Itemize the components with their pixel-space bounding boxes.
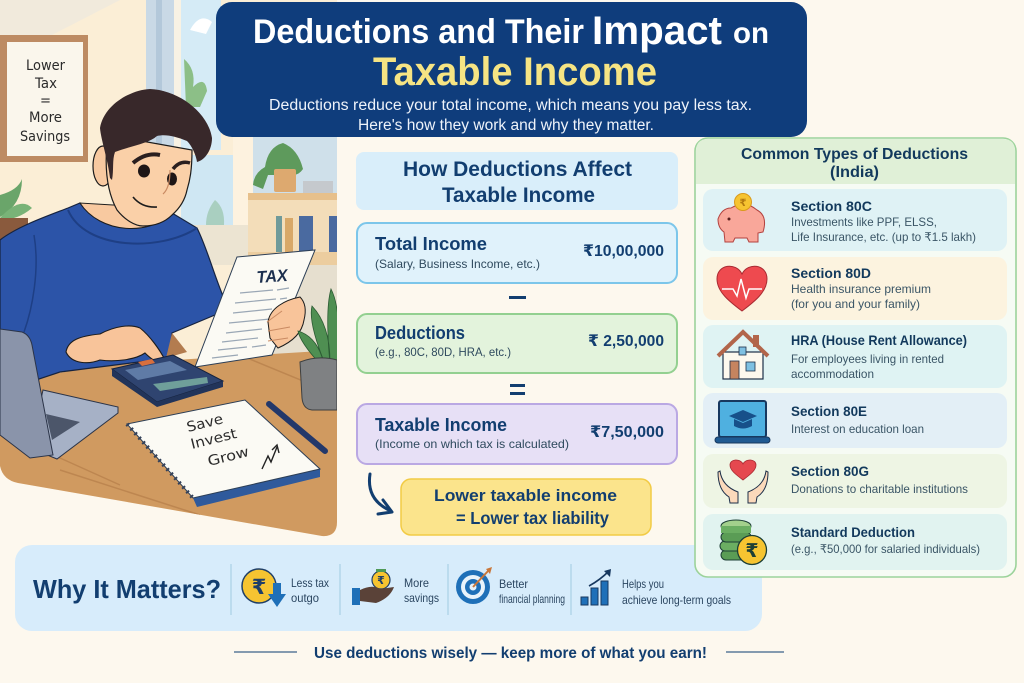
row: section 80C bbox=[703, 189, 1007, 251]
wall frame: = bbox=[40, 93, 51, 109]
row: section 80G: Section 80G bbox=[791, 463, 869, 479]
desk bbox=[0, 350, 337, 540]
item: more savings: ₹ bbox=[377, 575, 385, 587]
item: long-term goals bbox=[581, 569, 731, 607]
row: section 80G: Donations to charitable institutions bbox=[791, 482, 968, 496]
item: more savings: savings bbox=[404, 591, 439, 605]
potted plant bbox=[298, 289, 339, 410]
wall frame: Tax bbox=[34, 76, 57, 92]
wall frame: Savings bbox=[20, 129, 70, 145]
row: standard deduction bbox=[703, 514, 1007, 570]
row: section 80C: Life Insurance, etc. (up to ₹1.5 lakh) bbox=[791, 230, 976, 244]
card: taxable income bbox=[357, 404, 677, 464]
pen bbox=[269, 404, 325, 451]
item: better financial planning bbox=[456, 567, 565, 606]
callout: lower tax liability bbox=[401, 479, 651, 535]
icon: heart bbox=[717, 266, 767, 311]
notebook: Invest bbox=[189, 426, 239, 453]
icon: hands holding heart bbox=[718, 460, 768, 503]
row: section 80E: Section 80E bbox=[791, 403, 867, 419]
card: deductions bbox=[357, 314, 677, 373]
row: standard deduction: (e.g., ₹50,000 for salaried individuals) bbox=[791, 542, 980, 556]
row: section 80C: Investments like PPF, ELSS, bbox=[791, 215, 937, 229]
notebook: Grow bbox=[206, 444, 251, 470]
man: right hand bbox=[268, 297, 305, 348]
callout: lower tax liability: Lower taxable income bbox=[434, 486, 617, 505]
notebook: Save bbox=[185, 411, 225, 436]
title line 1 bbox=[253, 9, 769, 53]
card: total income: (Salary, Business Income, etc.) bbox=[375, 257, 540, 271]
row: section 80G bbox=[703, 454, 1007, 508]
row: section 80D bbox=[703, 257, 1007, 320]
bookshelf with plant bbox=[248, 143, 337, 265]
minus operator bbox=[509, 296, 526, 299]
card: deductions: Deductions bbox=[375, 323, 465, 343]
panel: common types of deductions bbox=[695, 138, 1016, 577]
subtitle: Here's how they work and why they matter. bbox=[358, 117, 654, 134]
item: more savings bbox=[352, 569, 439, 605]
arrow to callout bbox=[369, 474, 392, 514]
icon: coins and rupee: ₹ bbox=[745, 541, 759, 562]
row: standard deduction: Standard Deduction bbox=[791, 524, 915, 540]
icon: coins and rupee bbox=[720, 520, 766, 564]
panel: why it matters bbox=[15, 545, 762, 631]
heading: how deductions affect taxable income: How Deductions Affect bbox=[403, 157, 632, 181]
footer tagline: Use deductions wisely — keep more of what you earn! bbox=[314, 645, 707, 662]
item: less tax outgo: outgo bbox=[291, 591, 319, 605]
heading: why it matters: Why It Matters? bbox=[33, 574, 221, 604]
card: total income: Total Income bbox=[375, 234, 487, 254]
card: total income bbox=[357, 223, 677, 283]
icon: piggy bank bbox=[718, 194, 765, 242]
title line 2: Taxable Income bbox=[373, 50, 657, 94]
item: more savings: More bbox=[404, 576, 429, 590]
item: less tax outgo bbox=[242, 569, 329, 607]
tax sheet: TAX bbox=[256, 266, 290, 287]
row: section 80C: Section 80C bbox=[791, 198, 872, 214]
item: long-term goals: Helps you bbox=[622, 577, 664, 591]
callout: lower tax liability: = Lower tax liability bbox=[456, 508, 609, 528]
notebook bbox=[127, 400, 320, 507]
card: taxable income: (Income on which tax is calculated) bbox=[375, 437, 569, 451]
calculator bbox=[112, 355, 223, 407]
item: less tax outgo: ₹ bbox=[252, 576, 266, 599]
item: better financial planning: financial planning bbox=[499, 592, 565, 606]
card: total income: ₹10,00,000 bbox=[583, 243, 664, 260]
card: deductions: (e.g., 80C, 80D, HRA, etc.) bbox=[375, 345, 511, 359]
card: taxable income: ₹7,50,000 bbox=[590, 424, 664, 441]
heading: how deductions affect taxable income: Taxable Income bbox=[442, 183, 595, 207]
panel heading: (India) bbox=[830, 164, 879, 181]
title banner bbox=[216, 2, 807, 137]
man: left hand bbox=[66, 326, 165, 363]
subtitle bbox=[269, 97, 752, 134]
row: HRA bbox=[703, 325, 1007, 388]
window scene bbox=[146, 0, 337, 355]
equals operator bbox=[510, 384, 525, 395]
title line 1: Deductions and Their bbox=[253, 13, 584, 51]
man: neck and head bbox=[80, 89, 212, 229]
man: sweater bbox=[0, 203, 223, 392]
row: section 80E: Interest on education loan bbox=[791, 422, 924, 436]
row: section 80D: (for you and your family) bbox=[791, 297, 920, 311]
tax sheet bbox=[195, 250, 315, 367]
icon: piggy bank: ₹ bbox=[740, 198, 747, 209]
panel heading bbox=[741, 146, 968, 181]
item: less tax outgo: Less tax bbox=[291, 576, 329, 590]
card: taxable income: Taxable Income bbox=[375, 415, 507, 435]
row: section 80D: Health insurance premium bbox=[791, 282, 931, 296]
wall frame: More bbox=[29, 110, 62, 126]
heading: how deductions affect taxable income bbox=[356, 152, 678, 210]
subtitle: Deductions reduce your total income, which means you pay less tax. bbox=[269, 97, 752, 114]
card: deductions: ₹ 2,50,000 bbox=[588, 333, 664, 350]
row: section 80D: Section 80D bbox=[791, 265, 871, 281]
item: better financial planning: Better bbox=[499, 577, 528, 591]
title line 1: Impact bbox=[592, 9, 722, 53]
row: HRA: For employees living in rented bbox=[791, 352, 944, 366]
row: section 80E bbox=[703, 393, 1007, 448]
wall frame bbox=[0, 35, 88, 162]
laptop bbox=[0, 329, 118, 459]
left plant and chair bbox=[0, 179, 32, 242]
title line 1: on bbox=[733, 17, 769, 50]
row: HRA: accommodation bbox=[791, 367, 874, 381]
wall frame: Lower bbox=[26, 58, 65, 74]
icon: house bbox=[718, 332, 768, 379]
row: HRA: HRA (House Rent Allowance) bbox=[791, 332, 967, 348]
icon: laptop with graduation cap bbox=[715, 401, 770, 443]
panel heading: Common Types of Deductions bbox=[741, 146, 968, 163]
illustration: man calculating tax at desk bbox=[0, 0, 339, 540]
item: long-term goals: achieve long-term goals bbox=[622, 593, 731, 607]
